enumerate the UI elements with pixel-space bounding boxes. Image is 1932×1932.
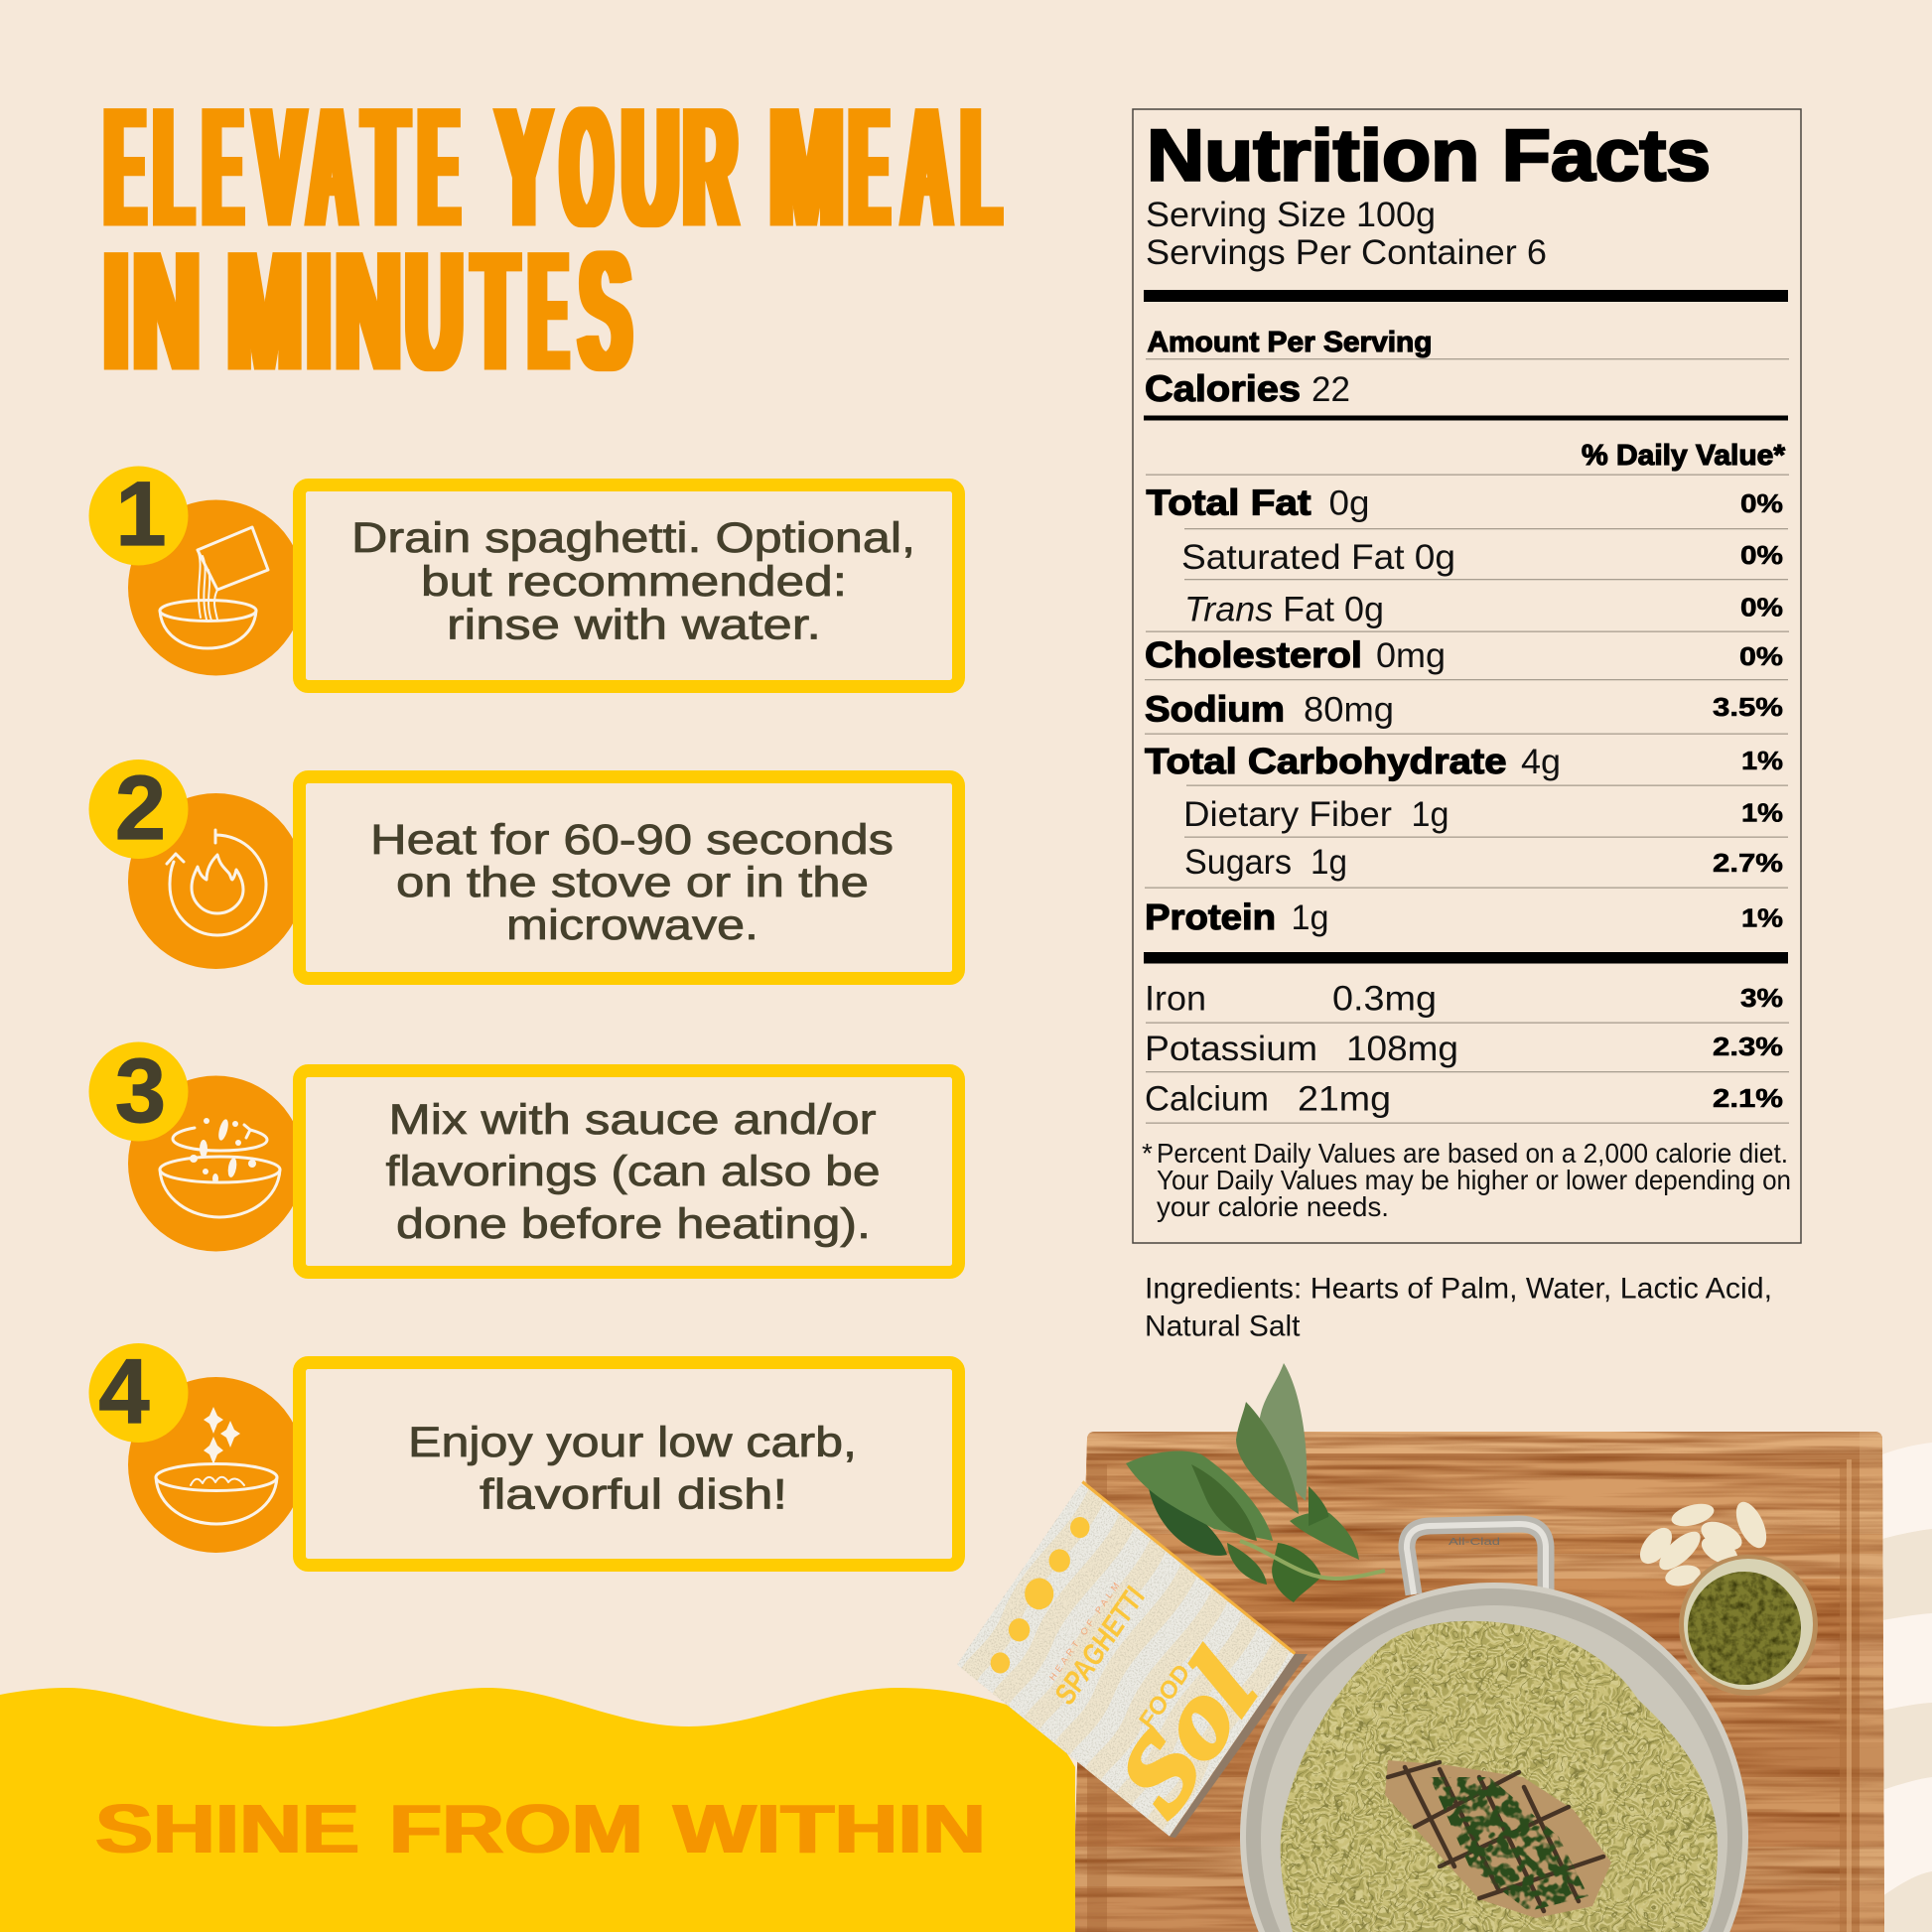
headline: E: [105, 71, 144, 262]
headline: T: [474, 216, 517, 407]
row: trans fat: [1184, 590, 1783, 629]
photo: spaghetti box: [952, 1478, 1309, 1852]
step 3 number badge: [89, 1042, 189, 1142]
row: dietary fiber: [1183, 795, 1783, 834]
row: total carbohydrate: 1%: [1741, 746, 1783, 775]
row: sugars: Sugars: [1184, 843, 1292, 882]
step 3 text: Mix with sauce and/or: [389, 1096, 876, 1144]
row: sodium: [1145, 689, 1783, 729]
step 1 text: but recommended:: [421, 558, 847, 606]
row: sugars: 1g: [1311, 843, 1347, 882]
row: dietary fiber: Dietary Fiber: [1183, 795, 1392, 834]
row: total carbohydrate: 4g: [1521, 743, 1561, 781]
headline: A: [309, 71, 355, 262]
calories: Calories: [1145, 368, 1301, 409]
box orange edge: [1081, 1480, 1296, 1655]
headline: [104, 71, 1000, 407]
step 4 text box: [300, 1362, 959, 1565]
row: calcium: 2.1%: [1713, 1083, 1783, 1113]
icon: noodles poured into bowl: [160, 527, 268, 648]
ingredients: Natural Salt: [1145, 1311, 1301, 1342]
step 1: [89, 464, 959, 687]
row: cholesterol: Cholesterol: [1145, 634, 1362, 675]
step 1 text: [351, 514, 915, 649]
photo: pesto bowl: [1679, 1555, 1818, 1696]
row: cholesterol: 0mg: [1376, 636, 1446, 675]
row: iron: Iron: [1145, 979, 1206, 1019]
daily value header: % Daily Value*: [1582, 440, 1786, 472]
step 1 orange circle: [128, 500, 304, 675]
step 2 text: microwave.: [506, 901, 759, 949]
row: iron: 0.3mg: [1332, 979, 1437, 1019]
footnote: [1142, 1138, 1791, 1222]
row: dietary fiber: 1%: [1741, 798, 1783, 828]
headline: R: [684, 71, 737, 262]
row: potassium: Potassium: [1145, 1030, 1317, 1068]
headline: U: [622, 71, 678, 262]
tagline: FROM: [389, 1790, 643, 1867]
headline: S: [580, 216, 630, 407]
row: total fat: 0g: [1328, 484, 1370, 522]
box heart of palm label: HEART OF PALM: [1047, 1581, 1121, 1683]
box brand sol: Sol: [1097, 1632, 1277, 1836]
yellow wave footer: [0, 1688, 1075, 1932]
headline: A: [903, 71, 951, 262]
handle brand text: All-Clad: [1449, 1537, 1500, 1548]
row: sodium: 80mg: [1304, 691, 1394, 729]
step 1 text: rinse with water.: [447, 602, 821, 649]
ingredients: [1145, 1273, 1772, 1342]
step 3 number: 3: [115, 1040, 166, 1142]
step 1 text box: [300, 484, 959, 687]
row: trans fat: 0%: [1740, 592, 1783, 621]
headline: T: [364, 71, 407, 262]
row: saturated fat: 0%: [1740, 540, 1783, 570]
headline: I: [104, 216, 128, 407]
step 3 text: flavorings (can also be: [385, 1148, 880, 1195]
grilled chicken: [1385, 1760, 1611, 1918]
headline: V: [255, 71, 304, 262]
headline: O: [562, 71, 612, 262]
footnote: Your Daily Values may be higher or lower depending on: [1157, 1165, 1791, 1195]
row: protein: 1%: [1741, 903, 1783, 933]
step 4 number badge: [89, 1343, 189, 1443]
row: saturated fat: Saturated Fat 0g: [1181, 538, 1455, 577]
box front: [957, 1482, 1295, 1837]
step 4: [89, 1341, 959, 1565]
row: potassium: 108mg: [1346, 1030, 1458, 1068]
tagline: SHINE: [95, 1790, 359, 1867]
step 2 number: 2: [115, 758, 166, 859]
row: calcium: 21mg: [1298, 1080, 1391, 1118]
serving information: Serving Size 100g: [1146, 196, 1436, 234]
icon: flavorings falling into bowl: [160, 1118, 280, 1217]
row: trans fat: Trans Fat 0g: [1184, 590, 1384, 629]
headline: I: [308, 216, 331, 407]
step 3 orange circle: [128, 1076, 304, 1251]
step 3: [89, 1040, 959, 1273]
headline: N: [336, 216, 401, 407]
headline: N: [133, 216, 200, 407]
box brand food for: FOOD: [1135, 1659, 1195, 1734]
headline: E: [419, 71, 458, 262]
pan rim: [1240, 1583, 1748, 1932]
spaghetti pile: [1281, 1620, 1718, 1932]
row: potassium: [1145, 1030, 1783, 1068]
row: total carbohydrate: Total Carbohydrate: [1145, 741, 1507, 781]
step 1 text: Drain spaghetti. Optional,: [351, 514, 915, 562]
step 4 number: 4: [98, 1341, 150, 1443]
step 2 orange circle: [128, 793, 304, 969]
infographic canvas: L: [962, 71, 1000, 262]
headline: E: [205, 71, 241, 262]
row: sodium: Sodium: [1145, 689, 1285, 729]
row: calcium: [1145, 1080, 1783, 1118]
icon: flame with circular arrow: [167, 830, 266, 935]
photo: pan handle: [1407, 1524, 1546, 1594]
row: protein: Protein: [1145, 897, 1276, 937]
row: dietary fiber: 1g: [1412, 795, 1449, 834]
step 2 text box: [300, 776, 959, 979]
ingredients: Ingredients: Hearts of Palm, Water, Lactic Acid,: [1145, 1273, 1772, 1305]
photo: pan with spaghetti: [1240, 1583, 1748, 1932]
serving information: Servings Per Container 6: [1146, 233, 1547, 272]
headline: E: [530, 216, 567, 407]
row: calcium: Calcium: [1145, 1080, 1269, 1118]
headline: E: [851, 71, 888, 262]
headline: M: [228, 216, 302, 407]
row: iron: 3%: [1740, 983, 1783, 1013]
headline: U: [406, 216, 463, 407]
step 2 text: Heat for 60-90 seconds: [370, 816, 894, 864]
row: total fat: [1146, 483, 1783, 522]
icon: bowl with sparkles: [156, 1407, 277, 1524]
step 4 text: [408, 1419, 857, 1519]
photo: wooden cutting board: [1067, 1432, 1891, 1932]
photo: garlic cloves: [1634, 1497, 1772, 1589]
right edge wavy stripes: [1882, 1443, 1932, 1932]
row: cholesterol: [1145, 634, 1783, 675]
headline: Y: [497, 71, 551, 262]
row: protein: 1g: [1291, 898, 1328, 937]
row: potassium: 2.3%: [1713, 1032, 1783, 1061]
row: protein: [1145, 897, 1783, 937]
step 2 text: on the stove or in the: [396, 859, 869, 906]
step 1 number badge: [89, 467, 189, 566]
step 1 number: 1: [115, 464, 167, 565]
step 2 text: [370, 816, 894, 949]
row: saturated fat: [1181, 538, 1783, 577]
headline: M: [770, 71, 843, 262]
step 4 orange circle: [128, 1377, 304, 1553]
row: sugars: 2.7%: [1713, 848, 1783, 878]
box spaghetti label: SPAGHETTI: [1048, 1580, 1151, 1712]
serving information: [1146, 196, 1547, 272]
footnote: *: [1142, 1138, 1153, 1169]
footnote: your calorie needs.: [1157, 1191, 1389, 1222]
row: total fat: Total Fat: [1146, 483, 1311, 522]
row: cholesterol: 0%: [1739, 641, 1783, 671]
calories: 22: [1311, 370, 1350, 409]
headline: L: [155, 71, 192, 262]
step 3 text: done before heating).: [396, 1200, 871, 1248]
row: iron: [1145, 979, 1783, 1019]
step 3 text: [385, 1096, 880, 1248]
row: total fat: 0%: [1740, 488, 1783, 518]
step 2 number badge: [89, 759, 189, 859]
row: sodium: 3.5%: [1713, 692, 1783, 722]
panel: nutrition facts: [1133, 109, 1801, 1243]
box side: [1170, 1654, 1308, 1838]
tagline: WITHIN: [673, 1790, 986, 1867]
row: sugars: [1184, 843, 1783, 882]
tagline: [95, 1790, 986, 1867]
amount per serving: Amount Per Serving: [1148, 327, 1432, 358]
step 3 text box: [300, 1070, 959, 1273]
row: total carbohydrate: [1145, 741, 1783, 781]
pan interior: [1261, 1605, 1727, 1932]
step 4 text: Enjoy your low carb,: [408, 1419, 857, 1466]
chopped herbs: [1430, 1777, 1588, 1911]
photo: basil sprig: [1126, 1363, 1385, 1602]
box badges: [977, 1512, 1102, 1678]
step 2: [89, 758, 959, 979]
step 4 text: flavorful dish!: [480, 1471, 787, 1519]
nutrition title: Nutrition Facts: [1147, 115, 1711, 197]
footnote: Percent Daily Values are based on a 2,000 calorie diet.: [1157, 1138, 1788, 1169]
